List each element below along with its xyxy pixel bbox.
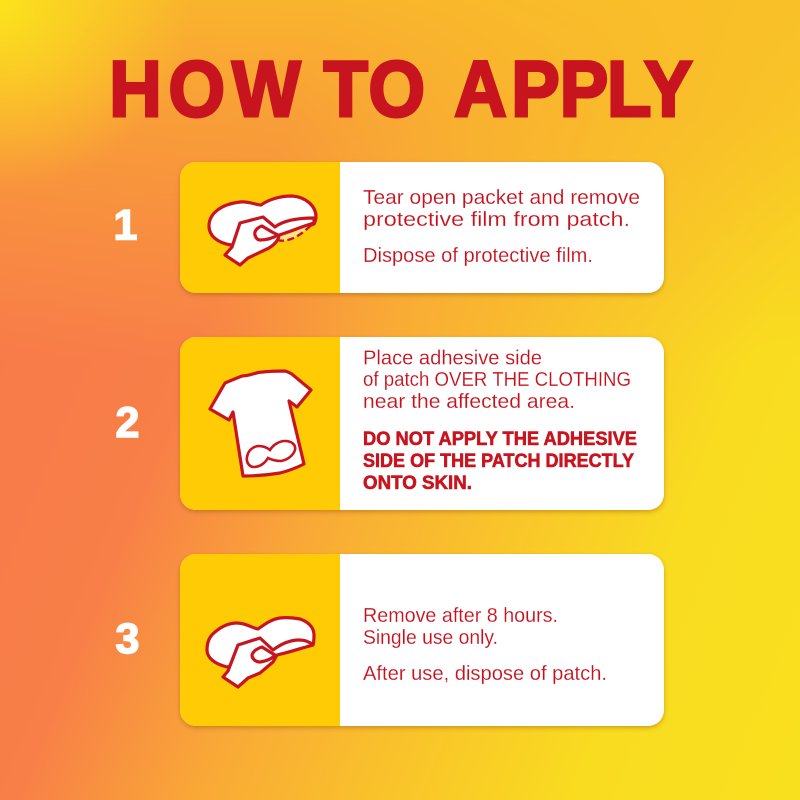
panel: step 3 bbox=[180, 554, 664, 726]
icon: t-shirt with patch bbox=[210, 371, 311, 476]
text: step 2 instructions: Place adhesive side bbox=[363, 348, 542, 370]
text: step 2 instructions bbox=[363, 348, 631, 413]
icon: hand removing patch bbox=[207, 618, 314, 687]
panel: step 2 bbox=[180, 337, 664, 510]
text: step 1 instructions bbox=[363, 187, 640, 267]
text: step 3 instructions: Single use only. bbox=[363, 627, 498, 649]
text: step 2 instructions: of patch OVER THE CLOTHING bbox=[363, 369, 631, 391]
warning text: SIDE OF THE PATCH DIRECTLY bbox=[363, 451, 634, 472]
text: step 2 instructions: near the affected area. bbox=[363, 391, 575, 413]
text: step 1 instructions: Tear open packet and remove bbox=[363, 187, 640, 209]
step number 3: 3 bbox=[116, 615, 139, 663]
panel: step 1 bbox=[180, 162, 664, 293]
title: HOW TO APPLY bbox=[109, 45, 693, 134]
text: step 1 instructions: protective film from patch. bbox=[363, 209, 630, 231]
warning text: DO NOT APPLY THE ADHESIVE bbox=[363, 429, 637, 450]
text: step 3 instructions: After use, dispose of patch. bbox=[363, 663, 607, 685]
warning text: ONTO SKIN. bbox=[363, 473, 472, 494]
text: step 3 instructions: Remove after 8 hours. bbox=[363, 605, 558, 627]
warning text bbox=[363, 429, 637, 494]
text: step 1 instructions: Dispose of protective film. bbox=[363, 245, 593, 267]
text: step 3 instructions bbox=[363, 605, 607, 685]
step number 1: 1 bbox=[114, 202, 137, 250]
step number 2: 2 bbox=[116, 399, 139, 447]
icon: hand peeling film from patch bbox=[209, 196, 316, 265]
